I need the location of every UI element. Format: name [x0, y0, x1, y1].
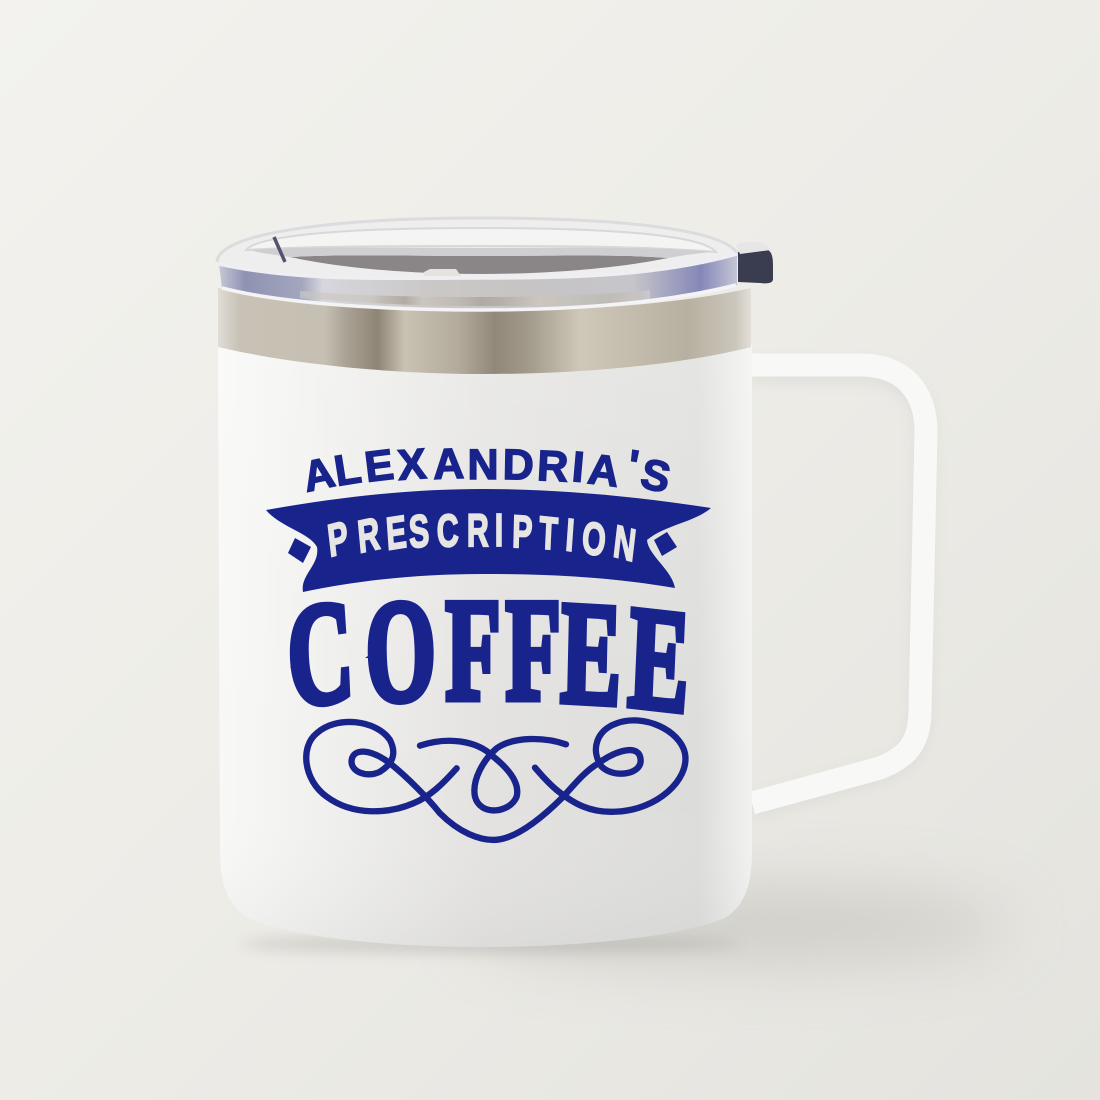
lid inner well: [290, 255, 668, 274]
lid top rim: [217, 218, 739, 311]
steel band: [218, 288, 751, 374]
lid vent: [424, 269, 461, 276]
lid tab: [738, 250, 773, 283]
coffee letter spurs: [290, 642, 384, 668]
wordmark: COFFEE: COFFEE: [283, 570, 693, 744]
name: ALEXANDRIA'S: ALEXANDRIA'S: [299, 440, 675, 503]
ribbon left diamond: [288, 538, 311, 563]
mug body: [218, 345, 752, 947]
lid outer edge: [217, 218, 739, 262]
lid upper edge: [219, 254, 737, 278]
lid lower edge: [222, 285, 736, 310]
steel seen through the lid: [300, 290, 650, 306]
lid dark reflection: [274, 237, 285, 262]
mug shadow: [240, 889, 1010, 961]
printed logo: [266, 440, 711, 840]
flourish ornament: [306, 720, 685, 840]
lid front wall: [219, 254, 737, 310]
transparent lid: [217, 218, 773, 311]
ribbon right diamond: [654, 532, 677, 556]
banner ribbon: [266, 489, 711, 592]
banner text: PRESCRIPTION: PRESCRIPTION: [325, 506, 638, 572]
mug handle: [748, 365, 926, 808]
lid inner ring: [246, 228, 716, 252]
